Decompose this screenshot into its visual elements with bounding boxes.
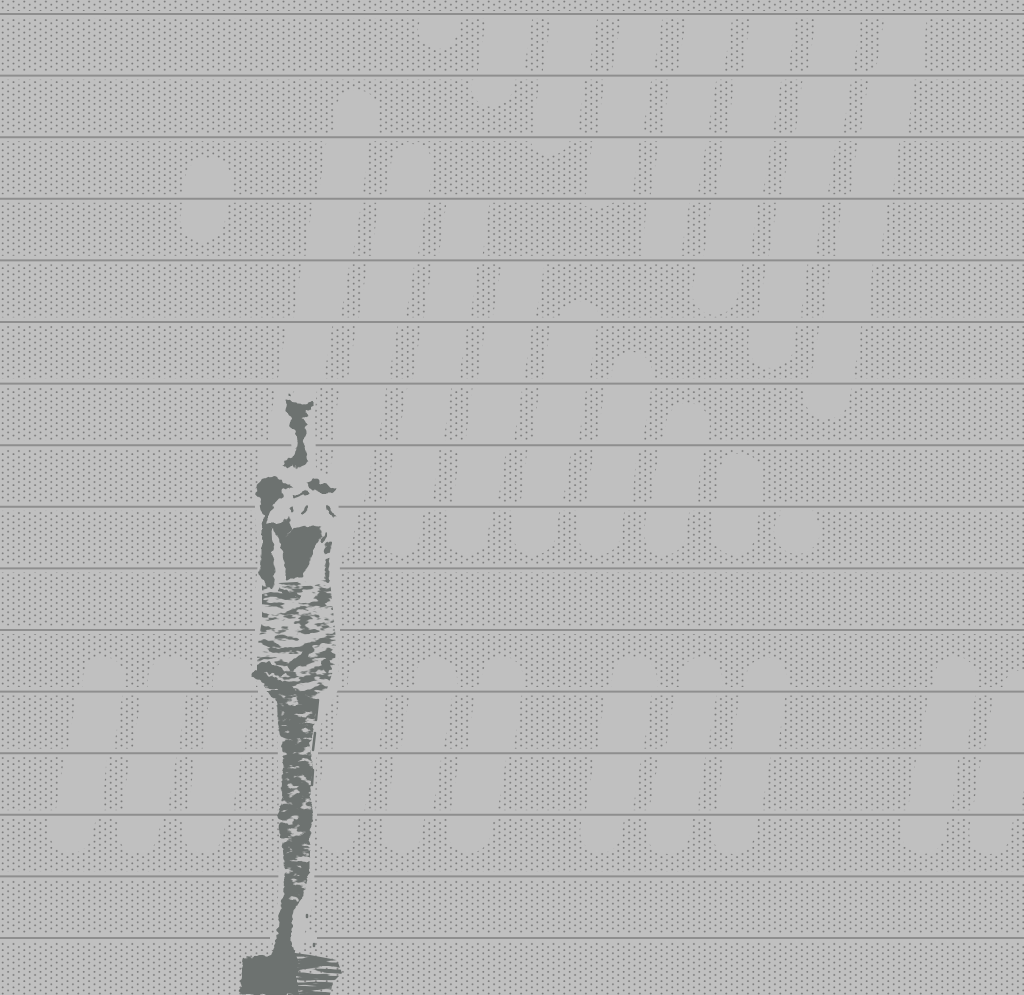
serpentine band 14	[49, 815, 1014, 854]
statue: light halo over dots	[254, 398, 340, 950]
serpentine band 1	[418, 14, 927, 76]
serpentine band 12	[67, 692, 1024, 753]
serpentine band 6	[277, 322, 862, 384]
serpentine band 11	[83, 656, 1024, 692]
serpentine band 3	[185, 137, 900, 199]
serpentine band 2	[333, 76, 915, 137]
statue: head and neck	[282, 400, 313, 470]
serpentine band 13	[55, 753, 1024, 815]
serpentine band 7	[267, 384, 852, 445]
statue: speckled hips and waist	[257, 580, 336, 695]
statue: left shoulder, arm and torso	[256, 476, 322, 590]
statue: solid base	[240, 953, 298, 995]
statue	[240, 394, 342, 995]
statue: legs	[267, 690, 320, 917]
statue: speckled side of torso	[257, 394, 333, 690]
statue: lower shin	[272, 900, 296, 955]
serpentine band 8	[260, 445, 763, 507]
serpentine band 4	[180, 199, 888, 260]
serpentine band 5	[293, 260, 873, 322]
statue: dark flecks by the leg	[307, 700, 318, 946]
serpentine band 9	[258, 507, 820, 556]
statue: right shoulder	[305, 478, 337, 493]
statue: streaked base	[288, 952, 342, 995]
